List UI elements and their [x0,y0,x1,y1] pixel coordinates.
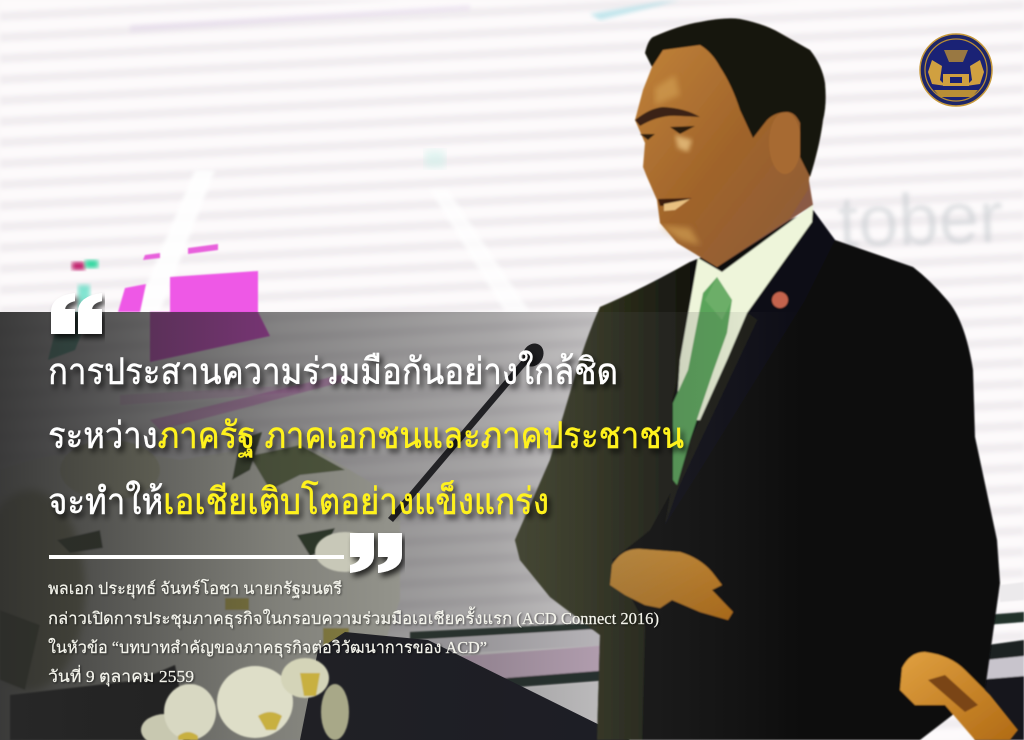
opening quotation mark [51,293,102,334]
ear [769,112,801,174]
flower arrangement behind overlay [0,432,400,740]
olive lit side of jacket sleeve [515,262,690,740]
lapel pin [772,292,788,308]
shirt collar [676,205,813,420]
lapel highlight [665,210,835,525]
date: วันที่ 9 ตุลาคม 2559 [48,665,194,687]
attribution text [48,579,659,687]
quote text [48,350,684,522]
jacket [515,210,1000,740]
government seal [920,34,992,106]
dark foliage behind orchids [10,665,190,740]
speaker name: พลเอก ประยุทธ์ จันทร์โอชา นายกรัฐมนตรี [48,579,342,599]
bright orchids in the foreground [141,532,375,740]
attribution rule [49,555,344,559]
quote line 2: ระหว่างภาครัฐ ภาคเอกชนและภาคประชาชน [48,415,684,458]
closing quotation mark [350,533,402,573]
podium [300,632,630,740]
right hand [900,652,1018,740]
speaker: prime minister [515,18,1018,740]
translucent dark overlay panel [0,312,800,740]
blurred "October" on the screen: tober [837,177,1004,263]
microphone [388,340,548,522]
hair [645,18,826,177]
magenta screen graphic [48,244,350,430]
quote line 3: จะทำให้เอเชียเติบโตอย่างแข็งแกร่ง [48,478,549,522]
lower background: dark stripes behind the podium [410,582,1024,740]
eyebrows, eyes, cheek highlight and mouth [635,107,700,126]
neck [690,160,813,267]
quote line 1: การประสานความร่วมมือกันอย่างใกล้ชิด [48,350,618,392]
face [635,40,812,267]
event: กล่าวเปิดการประชุมภาคธุรกิจในกรอบความร่วมมือเอเชียครั้งแรก (ACD Connect 2016) [48,606,659,629]
green tie [673,277,732,485]
left hand [610,549,733,620]
topic: ในหัวข้อ “บทบาทสำคัญของภาคธุรกิจต่อวิวัฒนาการของ ACD” [48,638,487,658]
